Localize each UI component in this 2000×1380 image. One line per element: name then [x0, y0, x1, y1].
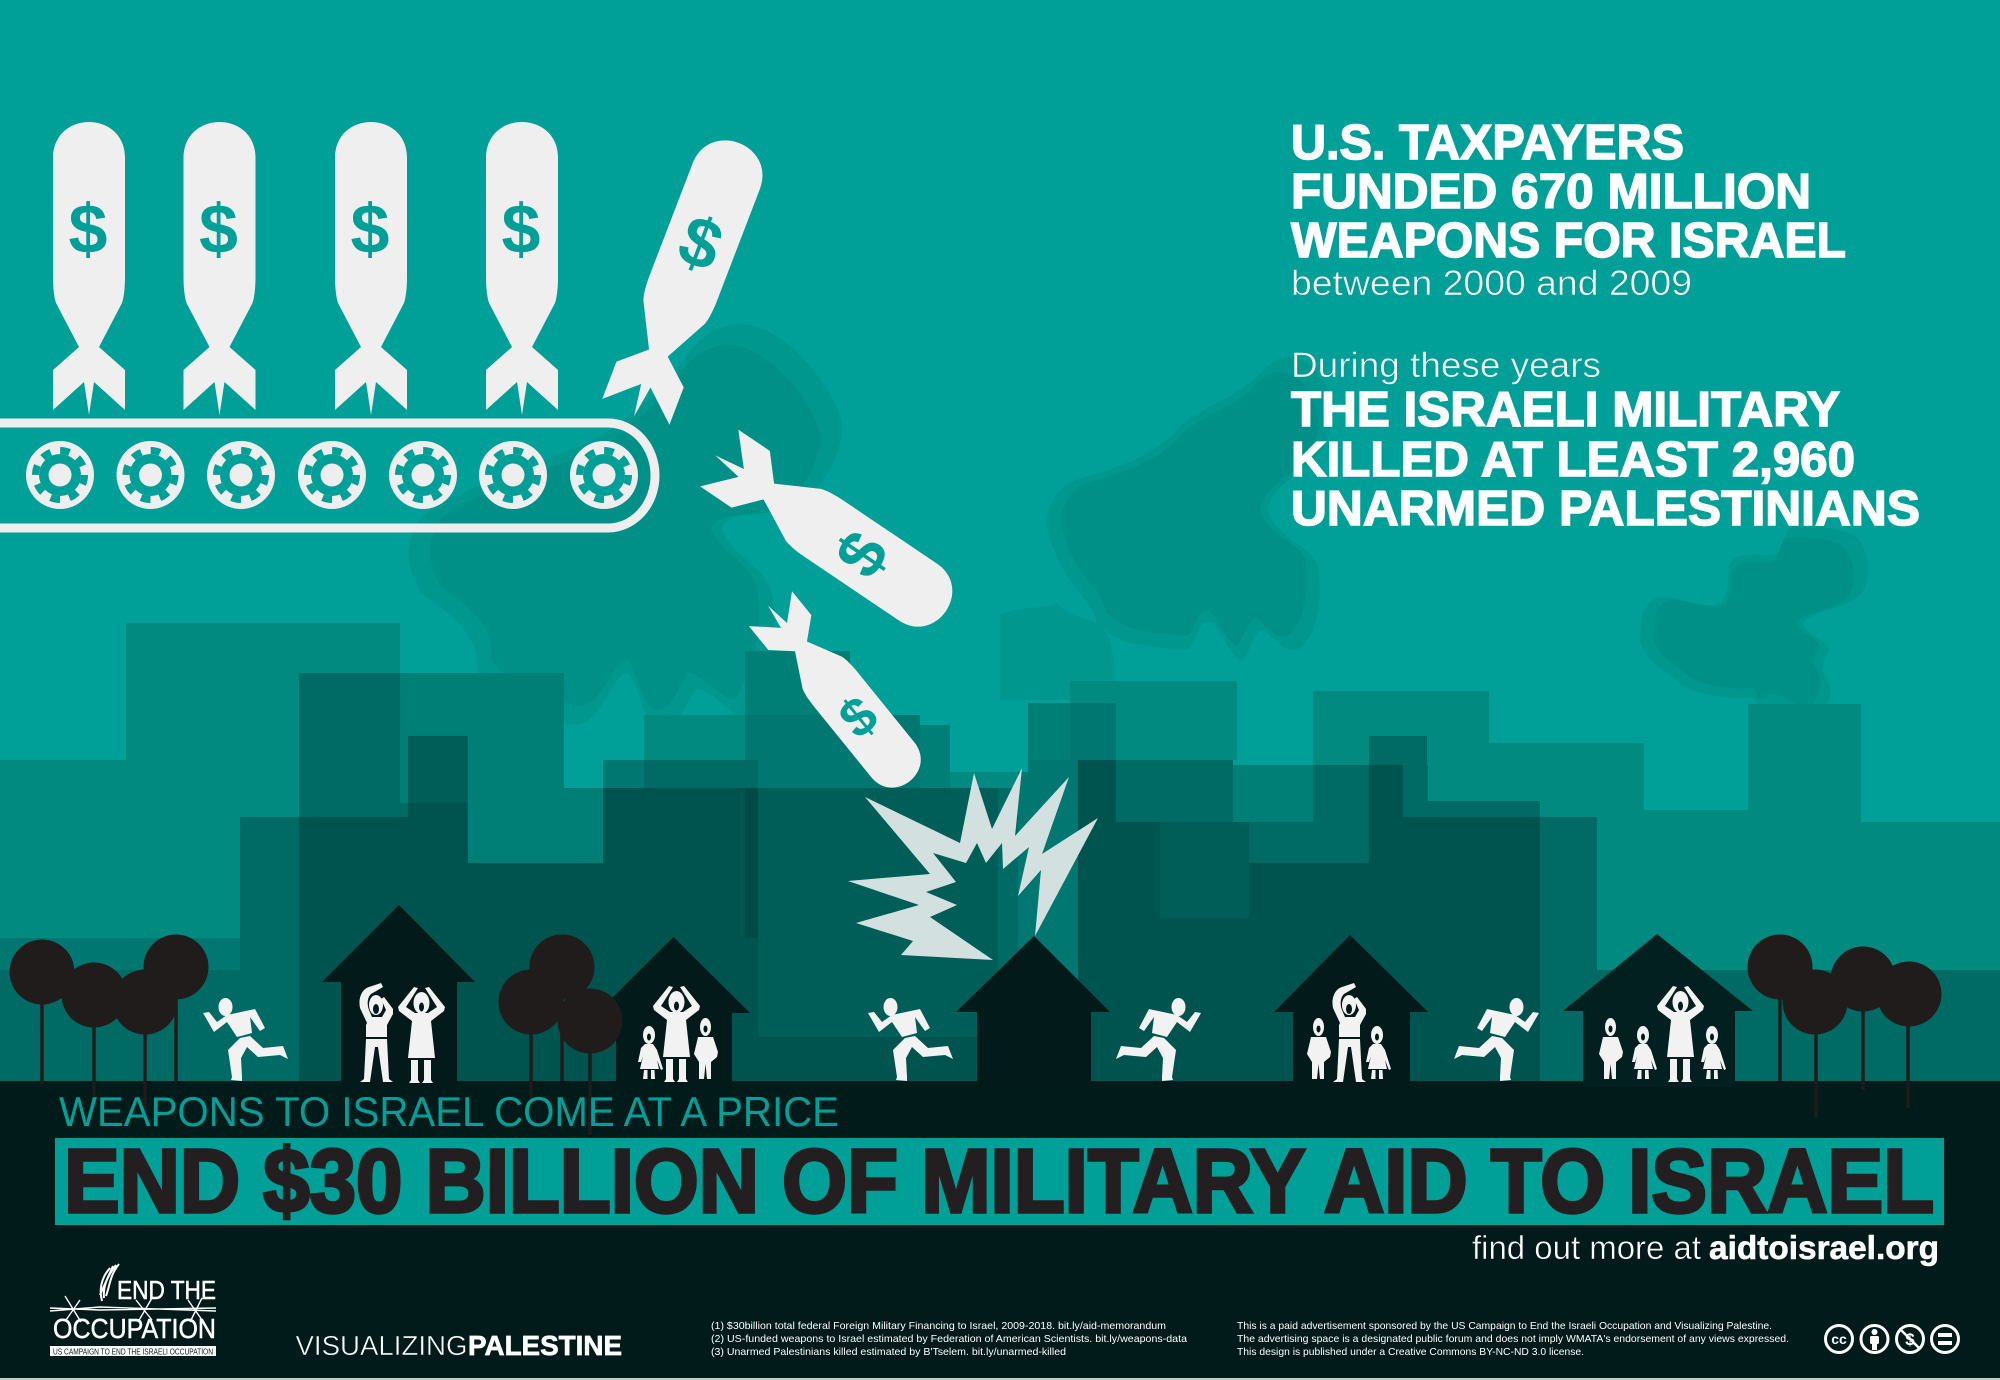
bomb 3 on the conveyor — [335, 122, 407, 415]
advertisement disclaimer: This design is published under a Creative Commons BY-NC-ND 3.0 license. — [1237, 1346, 1584, 1358]
logo: End the Occupation — [50, 1264, 216, 1356]
logo: End the Occupation: OCCUPATION — [53, 1313, 216, 1344]
bomb 7 falling: $ — [828, 685, 889, 750]
runner 4 — [1454, 998, 1539, 1081]
bomb 5 tipping off the belt — [600, 130, 773, 429]
bomb 6 falling — [696, 427, 965, 639]
advertisement disclaimer: This is a paid advertisement sponsored by the US Campaign to End the Israeli Occupation and Visualizing Palestine. — [1237, 1320, 1772, 1332]
bomb 5 tipping off the belt: $ — [669, 200, 733, 286]
bomb 3 on the conveyor: $ — [351, 190, 389, 268]
smoke: middle plume — [1000, 357, 1332, 700]
icon: by — [1861, 1326, 1888, 1352]
headline: weapons funded — [1291, 116, 1846, 303]
headline: palestinians killed: THE ISRAELI MILITARY — [1291, 383, 1840, 437]
headline: weapons funded: WEAPONS FOR ISRAEL — [1291, 214, 1846, 268]
advertisement disclaimer — [1237, 1320, 1789, 1358]
house 1 — [322, 905, 475, 1087]
house 2 — [597, 937, 750, 1087]
Creative Commons icons — [1826, 1326, 1958, 1352]
bomb 4 on the conveyor: $ — [502, 190, 540, 268]
runner 2 — [868, 998, 953, 1081]
headline: palestinians killed: UNARMED PALESTINIANS — [1291, 482, 1920, 536]
source footnotes: (3) Unarmed Palestinians killed estimated by B'Tselem. bit.ly/unarmed-killed — [711, 1346, 1066, 1358]
house 3 — [956, 936, 1110, 1087]
website link: find out more at — [1472, 1229, 1701, 1266]
trees: middle cluster — [498, 934, 622, 1054]
tree stems — [42, 995, 1908, 1135]
family in house 5 — [1599, 986, 1726, 1082]
bomb 2 on the conveyor — [184, 122, 256, 415]
source footnotes: (1) $30billion total federal Foreign Military Financing to Israel, 2009-2018. bit.ly/aid-memorandum — [711, 1320, 1166, 1332]
bomb 1 on the conveyor: $ — [69, 190, 107, 268]
website link: aidtoisrael.org — [1709, 1229, 1939, 1266]
source footnotes — [711, 1320, 1187, 1358]
headline: weapons funded: FUNDED 670 MILLION — [1291, 165, 1811, 219]
headline: palestinians killed — [1291, 346, 1920, 536]
logo: End the Occupation: US CAMPAIGN TO END THE ISRAELI OCCUPATION — [53, 1346, 213, 1356]
logo: Visualizing Palestine: VISUALIZING — [296, 1330, 468, 1361]
logo: Visualizing Palestine — [296, 1330, 622, 1361]
source footnotes: (2) US-funded weapons to Israel estimated by Federation of American Scientists. bit.ly/weapons-data — [711, 1333, 1187, 1345]
logo: Visualizing Palestine: PALESTINE — [468, 1330, 622, 1361]
logo barbed wire — [50, 1296, 216, 1322]
headline: palestinians killed: During these years — [1291, 346, 1601, 385]
trees: left cluster — [10, 934, 208, 1034]
headline: weapons funded: between 2000 and 2009 — [1291, 264, 1692, 303]
runner 1 — [203, 998, 288, 1081]
headline: palestinians killed: KILLED AT LEAST 2,960 — [1291, 433, 1855, 487]
trees: right cluster — [1748, 934, 1942, 1034]
icon: nc: $ — [1905, 1330, 1915, 1349]
icon: nd — [1932, 1326, 1958, 1352]
house 5 — [1563, 934, 1753, 1087]
house 4 — [1274, 935, 1428, 1087]
skyline: layered buildings — [0, 623, 2000, 1090]
explosion — [848, 768, 1098, 960]
headline: weapons funded: U.S. TAXPAYERS — [1291, 116, 1684, 170]
conveyor belt — [0, 423, 655, 528]
smoke plumes — [409, 324, 1868, 730]
tagline: WEAPONS TO ISRAEL COME AT A PRICE — [59, 1088, 839, 1135]
bomb 1 on the conveyor — [53, 122, 125, 415]
logo wheat icon — [100, 1264, 119, 1301]
icon: cc: cc — [1831, 1331, 1847, 1347]
family in house 1 — [359, 983, 445, 1083]
runner 3 — [1116, 998, 1201, 1081]
conveyor gears — [26, 441, 638, 509]
ground — [0, 1081, 2000, 1380]
bomb 2 on the conveyor: $ — [199, 190, 238, 268]
family in house 2 — [638, 986, 718, 1082]
website link — [1472, 1229, 1939, 1266]
family in house 4 — [1307, 983, 1391, 1082]
bomb 7 falling — [746, 588, 932, 798]
smoke: left plume — [409, 324, 842, 730]
advertisement disclaimer: The advertising space is a designated public forum and does not imply WMATA's endorsement of any views expressed. — [1237, 1333, 1789, 1345]
bomb 6 falling: $ — [821, 519, 903, 591]
bomb 4 on the conveyor — [486, 122, 558, 415]
logo: End the Occupation: END THE — [117, 1275, 216, 1305]
smoke: right plume — [1640, 527, 1868, 722]
